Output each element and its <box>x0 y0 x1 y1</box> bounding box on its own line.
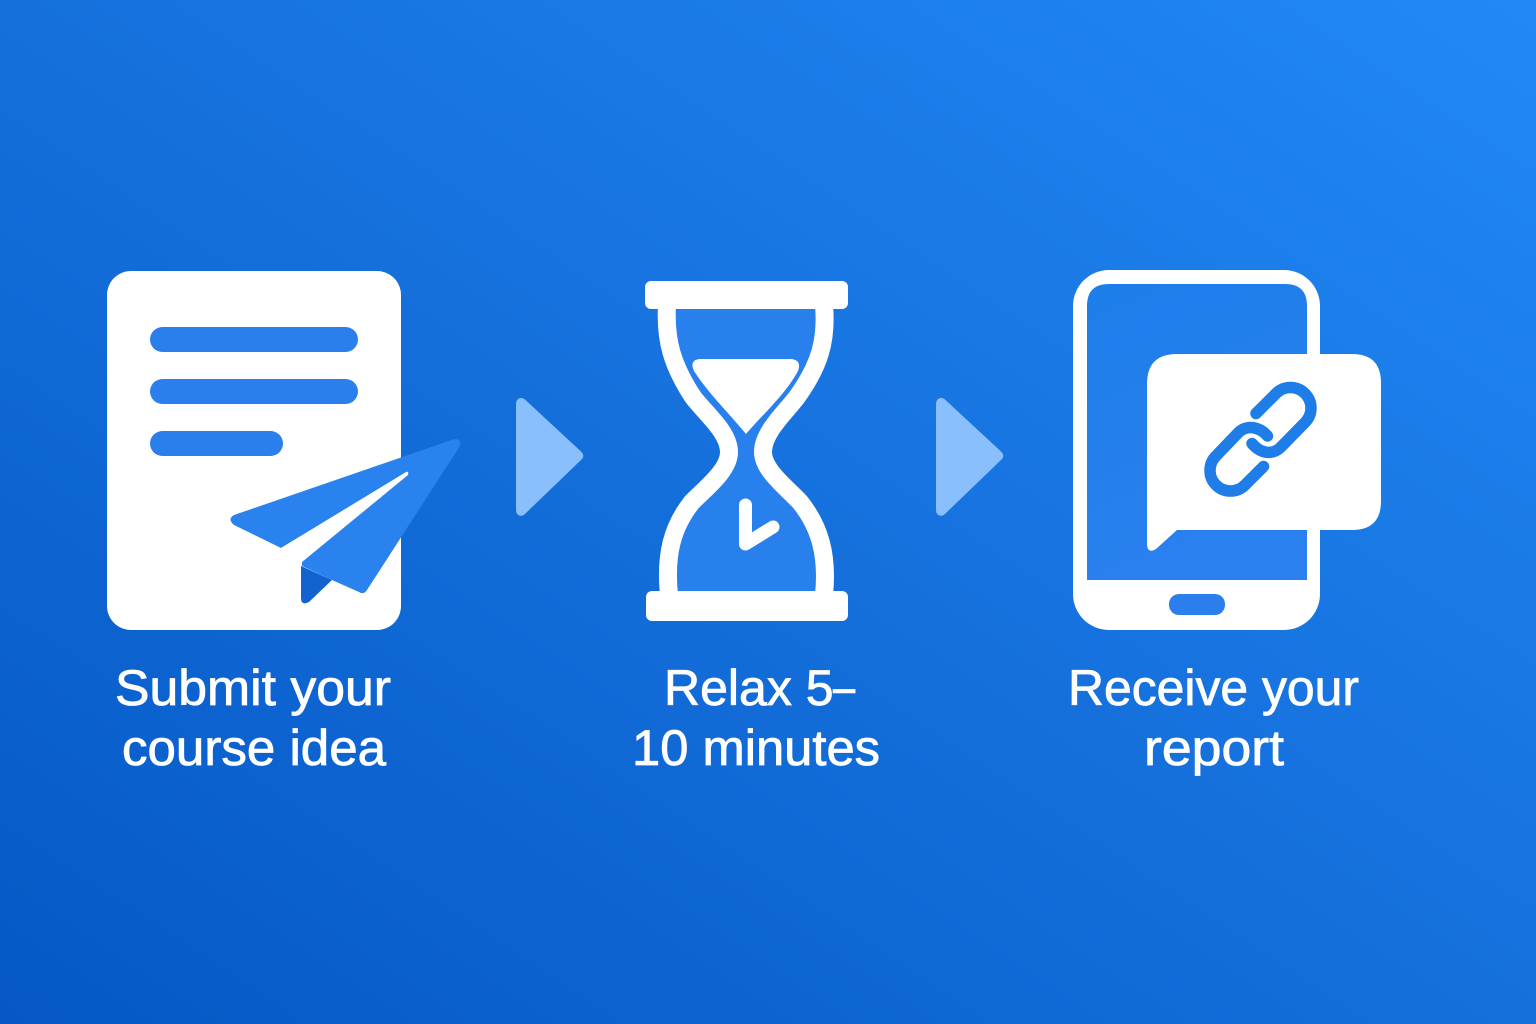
label: receive your report: Receive your <box>1068 660 1359 716</box>
label: submit your course idea: course idea <box>122 720 386 776</box>
label: submit your course idea: Submit your <box>115 660 391 716</box>
arrow: step 2 to step 3 <box>936 398 1003 516</box>
icon: phone with link message <box>1073 270 1381 630</box>
label: relax 5-10 minutes <box>632 660 880 776</box>
arrow: step 1 to step 2 <box>516 398 583 516</box>
icon: hourglass <box>645 281 848 621</box>
label: receive your report <box>1068 660 1359 776</box>
label: submit your course idea <box>115 660 391 776</box>
label: receive your report: report <box>1144 720 1284 776</box>
label: relax 5-10 minutes: 10 minutes <box>632 720 880 776</box>
label: relax 5-10 minutes: – <box>834 668 856 710</box>
label: relax 5-10 minutes: Relax 5 <box>664 660 834 716</box>
icon: document with paper plane <box>107 271 460 630</box>
